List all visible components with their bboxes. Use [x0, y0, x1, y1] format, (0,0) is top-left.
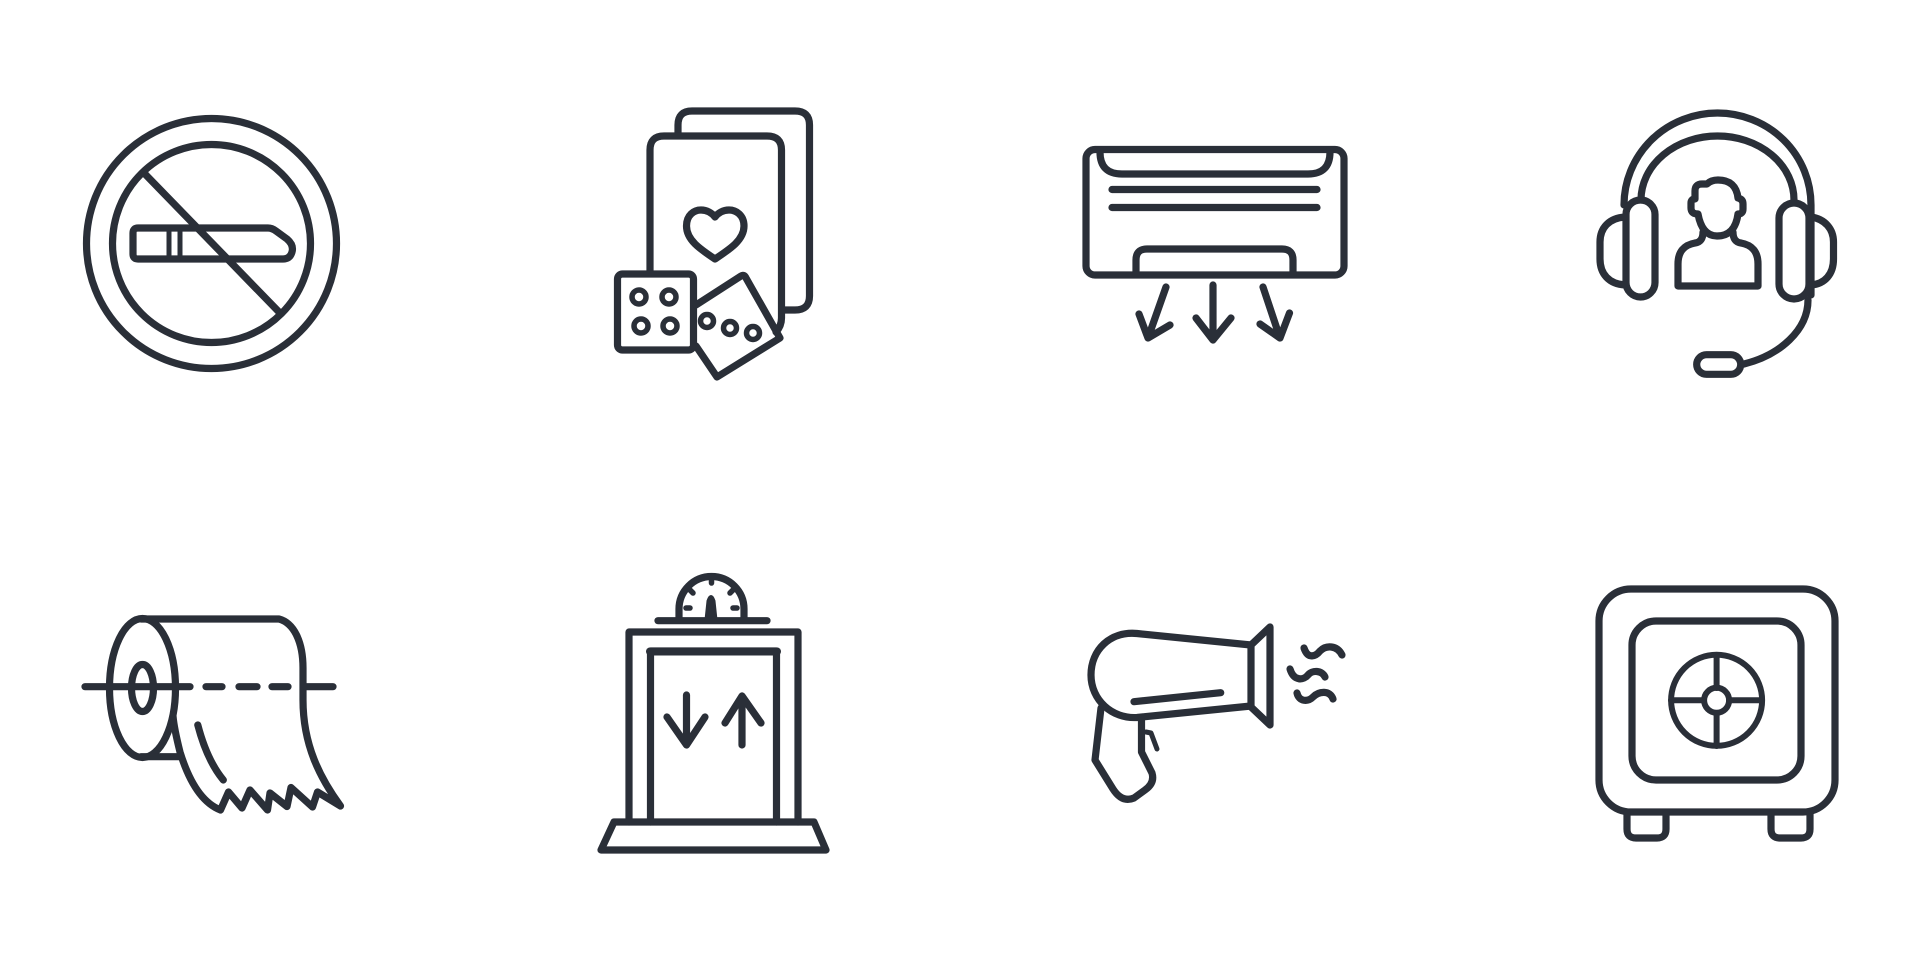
bottom tab: [1136, 249, 1293, 274]
ear cups: [1626, 200, 1655, 297]
floor indicator: [679, 576, 744, 620]
icon: playing cards and dice: [618, 111, 810, 377]
front card: [650, 136, 782, 332]
outer pads: [1600, 217, 1625, 285]
nozzle: [1251, 627, 1270, 725]
direction arrows: [667, 695, 705, 745]
outer frame: [629, 632, 798, 822]
slot: [1134, 693, 1221, 702]
icon: safe: [1599, 589, 1835, 838]
vent lines: [1112, 190, 1317, 208]
icon: hair dryer: [1091, 627, 1342, 799]
heart: [686, 210, 744, 259]
icon: toilet paper roll: [85, 618, 340, 810]
agent body: [1678, 232, 1758, 286]
cigarette: [133, 228, 292, 259]
roll outline and sheet: [141, 619, 340, 810]
core: [132, 664, 154, 712]
trigger: [1146, 732, 1157, 749]
handle: [1095, 708, 1153, 799]
tilted die: [696, 275, 780, 377]
air waves: [1304, 647, 1342, 656]
sheet fold: [198, 725, 223, 780]
feet: [1627, 814, 1810, 838]
microphone arm: [1744, 300, 1808, 364]
dial: [1671, 655, 1762, 746]
cigarette filter bands: [169, 229, 180, 258]
icon: no smoking: [86, 118, 336, 368]
headband: [1624, 113, 1811, 295]
body: [1091, 633, 1251, 718]
icon: customer support headset: [1600, 113, 1834, 374]
microphone: [1697, 355, 1741, 374]
back card: [678, 111, 810, 310]
safe door: [1632, 621, 1801, 780]
agent head: [1691, 180, 1743, 236]
air arrows: [1139, 285, 1290, 340]
louvre: [1100, 150, 1330, 174]
prohibition slash: [144, 173, 279, 312]
icon: elevator: [601, 576, 826, 850]
square die: [618, 274, 694, 350]
threshold: [601, 822, 826, 850]
door: [650, 651, 776, 822]
axis: [85, 683, 333, 690]
icon: air conditioner: [1086, 150, 1344, 340]
